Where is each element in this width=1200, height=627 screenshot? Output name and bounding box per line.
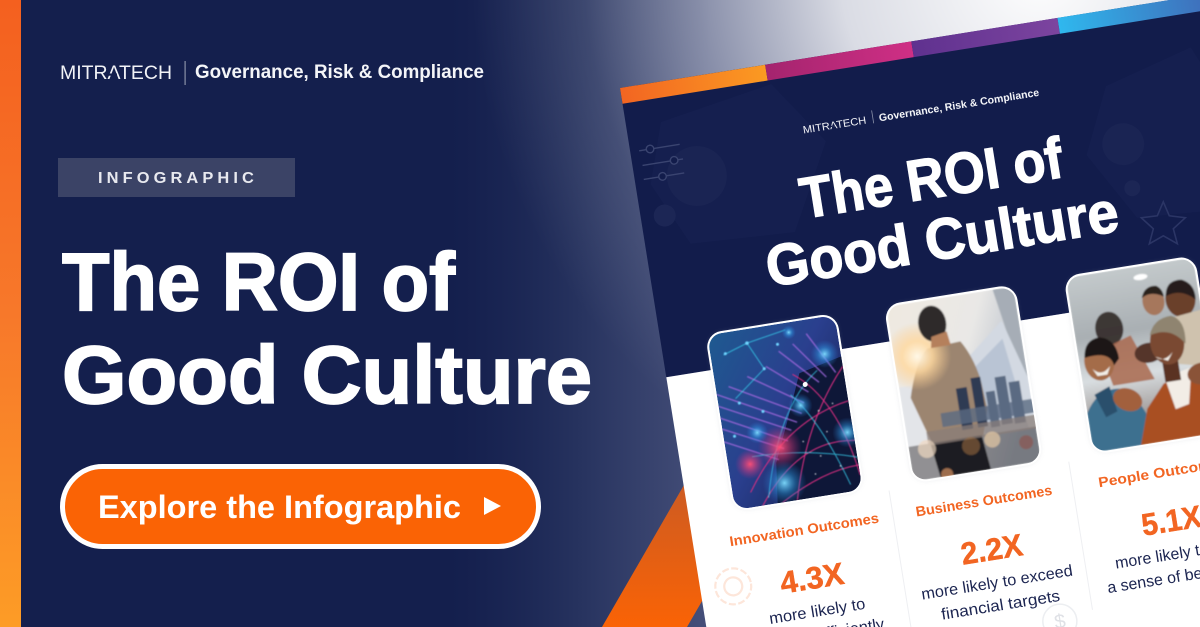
legs and lower band [908, 427, 1041, 481]
head [917, 304, 948, 342]
icon: gear [714, 567, 752, 606]
sheet logo [803, 90, 1039, 134]
column: innovation outcomes: more likely to [768, 596, 867, 627]
icon: play arrow [484, 497, 501, 515]
icon: dollar [1042, 604, 1078, 627]
clapping hands [1112, 387, 1143, 412]
sheet white body [666, 292, 1200, 627]
woman shirt [1166, 368, 1192, 410]
ceiling light [1133, 273, 1148, 281]
woman jacket [1140, 380, 1200, 445]
card: people photo [1063, 255, 1200, 455]
building planes [992, 288, 1027, 373]
logo lockup [60, 61, 484, 85]
column: business outcomes: Business Outcomes [914, 482, 1053, 519]
sheet title [767, 135, 1118, 285]
background people [1094, 311, 1124, 346]
sheet title: The ROI of [795, 125, 1068, 231]
sheet logo: Governance, Risk & Compliance [878, 87, 1040, 124]
sheet title: Good Culture [761, 179, 1123, 300]
icon: sliders [639, 144, 684, 181]
title [62, 237, 592, 421]
sheet navy header [620, 0, 1200, 377]
title: The ROI of [62, 237, 456, 328]
column: innovation outcomes: Innovation Outcomes [728, 510, 880, 549]
column: innovation outcomes [730, 516, 884, 627]
header decorations [654, 180, 1140, 226]
orange triangle accent [602, 485, 720, 627]
call to action button: Explore the Infographic [98, 489, 461, 525]
tag: infographic: INFOGRAPHIC [98, 170, 258, 187]
division name: Governance, Risk & Compliance [195, 62, 484, 83]
title: Good Culture [62, 330, 592, 421]
card: innovation photo [707, 314, 861, 508]
column: business outcomes: financial targets [940, 588, 1061, 624]
sheet logo: MITRATECH [802, 115, 867, 137]
left pale tower [900, 388, 916, 445]
column: business outcomes: 2.2X [958, 527, 1025, 572]
column: people outcomes [1098, 464, 1200, 593]
column: business outcomes: more likely to exceed [920, 563, 1074, 604]
column dividers [889, 462, 1097, 627]
column: business outcomes [916, 488, 1072, 620]
call to action button [62, 466, 538, 546]
orange side strip [0, 0, 21, 627]
tag: infographic [58, 158, 295, 197]
card: business photo [886, 286, 1040, 480]
skyline [940, 375, 1034, 430]
logo divider [184, 61, 186, 85]
column: innovation outcomes: 4.3X [778, 556, 847, 601]
icon: star [1141, 202, 1185, 244]
man [1087, 388, 1147, 450]
wordmark: MITRATECH [60, 63, 172, 84]
color bar [620, 0, 1200, 104]
jacket [910, 340, 988, 443]
woman head [1162, 358, 1181, 382]
infographic preview sheet [620, 0, 1200, 627]
